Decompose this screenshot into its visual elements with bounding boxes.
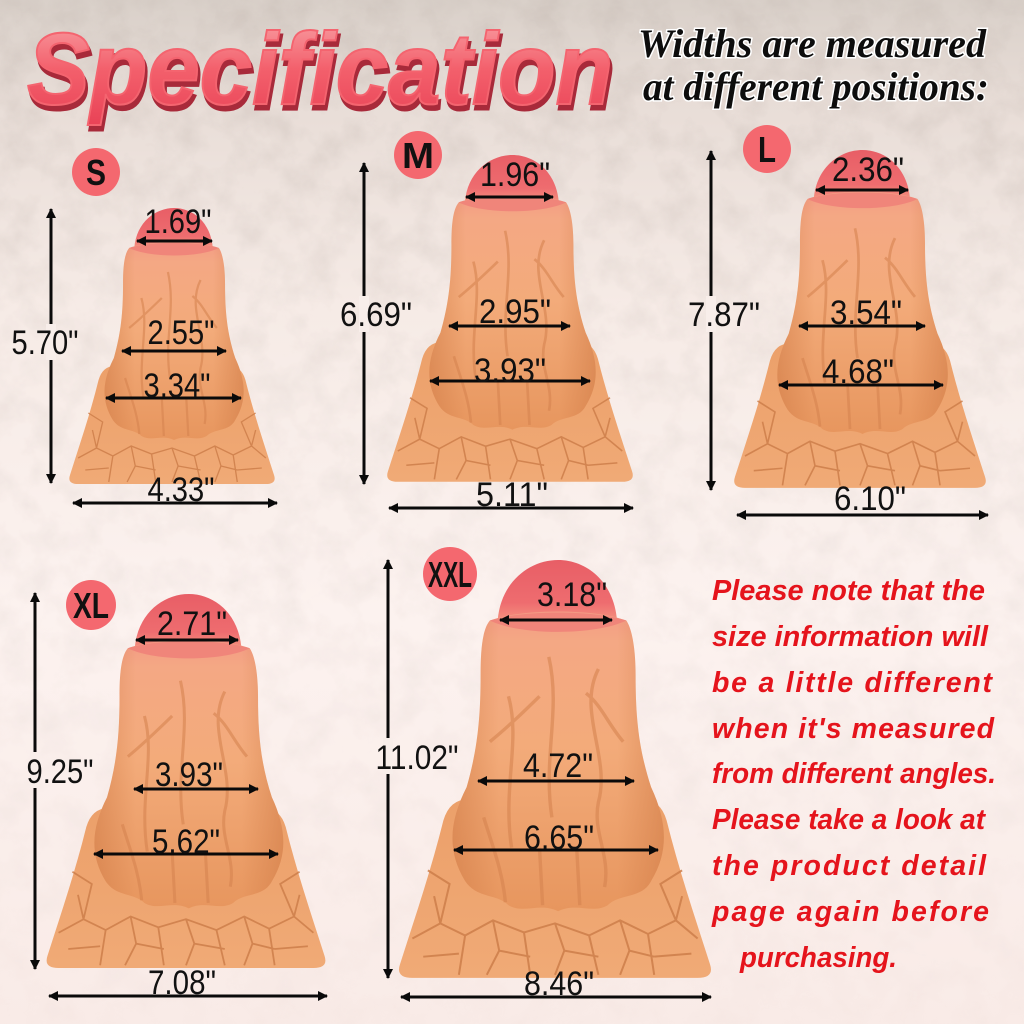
callout: red measurement note: Please note that the [712,575,985,607]
width L base: 6.10" [834,480,906,518]
height M: 6.69" [340,296,412,334]
badge L [743,125,791,173]
product silhouette XXL [399,560,711,978]
badge M: M [402,135,434,176]
width M top: 1.96" [480,156,550,194]
subtitle text [638,21,989,109]
callout: red measurement note: size information will [712,621,989,653]
width L middle: 3.54" [830,294,902,332]
width XL base: 7.08" [148,964,216,1002]
height S [12,209,78,483]
callout: red measurement note: from different angles. [712,758,996,790]
subtitle text: Widths are measured [638,21,987,66]
height L: 7.87" [688,296,760,334]
width XXL base: 8.46" [524,965,594,1003]
badge S [72,148,120,196]
width M lower: 3.93" [474,352,546,390]
product silhouette S [69,208,275,484]
panel: size L [688,125,988,518]
callout: red measurement note: Please take a look at [712,804,986,836]
callout: red measurement note: page again before [711,896,989,928]
width XXL top [500,576,612,620]
height L [688,151,760,490]
width XXL top: 3.18" [537,576,607,614]
height XL [26,593,94,969]
callout: red measurement note: when it's measured [712,713,995,745]
height XXL [376,560,458,978]
badge XXL: XXL [428,554,472,595]
width S middle: 2.55" [148,314,214,352]
width L top: 2.36" [832,151,904,189]
height XL: 9.25" [26,753,94,791]
width XL middle: 3.93" [155,756,223,794]
width S base: 4.33" [148,471,214,509]
subtitle text: at different positions: [643,64,989,109]
product silhouette L [734,150,986,488]
width XL top: 2.71" [157,605,227,643]
width M middle: 2.95" [479,293,551,331]
badge XL: XL [73,585,109,626]
width M base: 5.11" [476,476,548,514]
width XL middle [134,756,258,794]
panel: size XL [26,580,327,1002]
badge S: S [86,152,106,193]
width S lower [106,367,241,405]
panel: size M [340,131,633,514]
callout: red measurement note: be a little different [712,667,994,699]
width XXL lower: 6.65" [524,819,594,857]
product silhouette M [387,155,633,482]
width XL lower: 5.62" [152,823,220,861]
title: Specification [27,12,613,126]
background: pale stone texture [0,0,1024,444]
panel: size XXL [376,547,711,1003]
width M middle [449,293,570,331]
badge XXL [423,547,477,601]
height M [340,163,412,484]
panel: size S [12,148,277,509]
callout: red measurement note: the product detail [712,850,987,882]
height XXL: 11.02" [376,739,458,777]
badge M [394,131,442,179]
callout: red measurement note [711,575,996,974]
width XXL middle: 4.72" [523,747,593,785]
badge L: L [758,129,776,170]
badge XL [66,580,116,630]
title: Specification [29,17,615,131]
width S lower: 3.34" [144,367,210,405]
width L middle [799,294,925,332]
height S: 5.70" [12,324,78,362]
product silhouette XL [47,594,325,968]
width L lower: 4.68" [822,353,894,391]
callout: red measurement note: purchasing. [739,942,897,974]
width S top: 1.69" [144,203,212,241]
